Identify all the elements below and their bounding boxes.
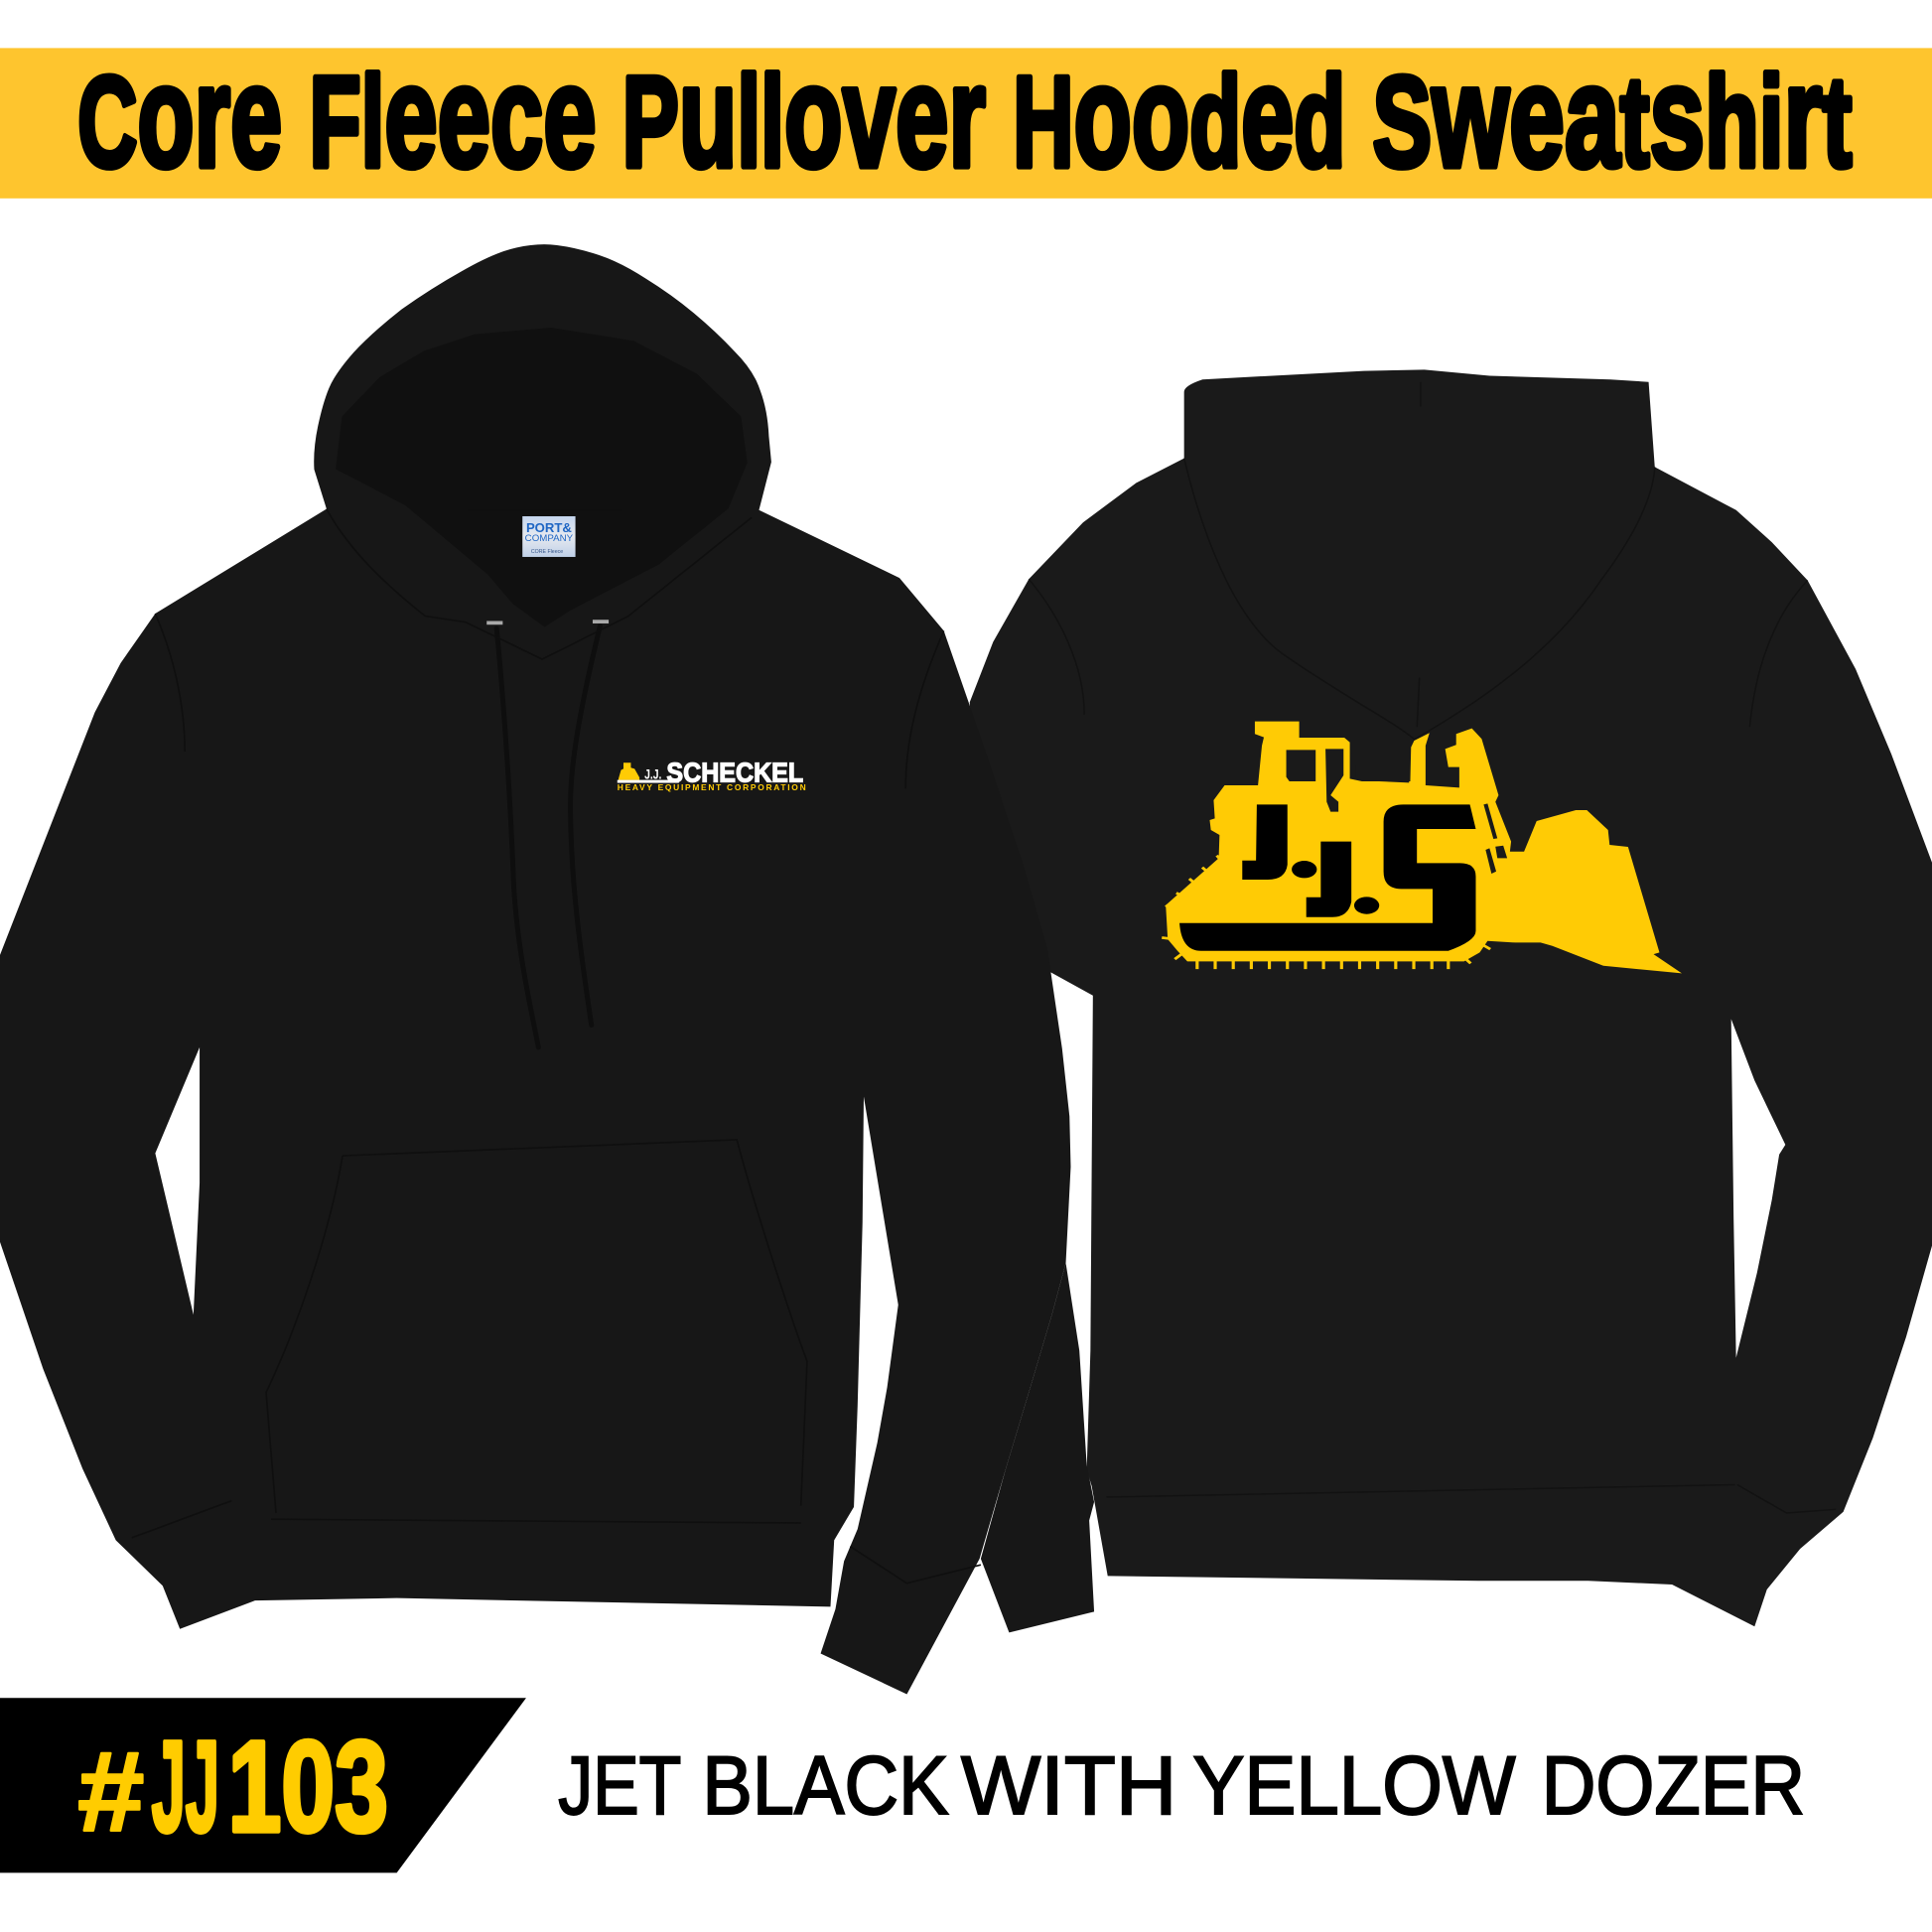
front seams and pocket <box>132 509 981 1584</box>
front chest logo <box>618 757 806 792</box>
style number text <box>77 1714 388 1859</box>
drawstrings <box>496 625 600 1047</box>
small dozer mark <box>619 762 639 780</box>
front hoodie silhouette <box>0 244 1070 1694</box>
style number text: 103 <box>228 1714 388 1859</box>
title text: Pullover <box>622 36 986 199</box>
style number text: # <box>77 1729 144 1856</box>
back view hoodie <box>970 369 1932 1632</box>
dozer windows and hydraulics <box>1287 749 1507 874</box>
neck label <box>522 516 576 557</box>
hood interior shadow <box>336 328 748 627</box>
style number badge <box>0 1698 526 1872</box>
title text: Fleece <box>310 36 597 199</box>
dozer track teeth <box>1162 856 1490 969</box>
colour description: BLACK <box>702 1739 949 1832</box>
colour description: DOZER <box>1542 1739 1805 1832</box>
yellow dozer graphic with JJS logo <box>1162 722 1682 973</box>
colour description: YELLOW <box>1192 1739 1516 1832</box>
title text <box>77 36 1852 199</box>
front view hoodie <box>0 244 1070 1694</box>
title text: Core <box>77 36 282 199</box>
colour description: WITH <box>961 1739 1176 1832</box>
SCHECKEL wordmark: SCHECKEL <box>666 757 803 787</box>
title text: Hooded <box>1013 36 1345 199</box>
JJS logo letters <box>1179 804 1475 951</box>
back hood seams <box>1029 382 1836 1513</box>
logo tagline: HEAVY EQUIPMENT CORPORATION <box>618 782 806 792</box>
back hoodie hidden sleeve <box>981 1263 1094 1632</box>
style number text: JJ <box>152 1714 219 1859</box>
drawstring grommets <box>486 620 609 624</box>
title banner <box>0 36 1932 199</box>
small JJ initials: J.J. <box>644 766 661 781</box>
label brand text: PORT& <box>526 520 572 535</box>
colour description <box>558 1739 1805 1832</box>
title text: Sweatshirt <box>1373 36 1852 199</box>
back hoodie body and hood <box>970 369 1932 1626</box>
neck label: CORE Fleece <box>531 549 563 555</box>
colour description: JET <box>558 1739 681 1832</box>
neck label: COMPANY <box>525 533 573 543</box>
logo dots <box>1292 861 1379 914</box>
